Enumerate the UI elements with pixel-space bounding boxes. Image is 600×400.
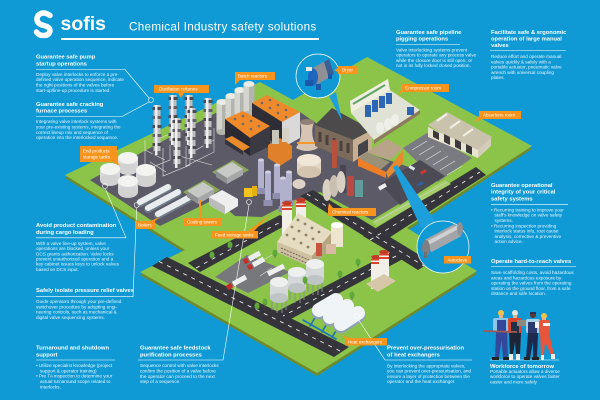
- text: facilitate safe and ergonomic operation: operation of large manual: [491, 36, 562, 42]
- text: guarantee operational integrity: • Recurring inspection providing: [491, 223, 557, 228]
- text: prevent over-pressurisation: Prevent over-pressurisation: [387, 346, 464, 352]
- wrench: [483, 331, 517, 332]
- icon: autoclave: [422, 222, 463, 258]
- text: guarantee safe pipeline pigging operations: operators to operate any process valve: [396, 53, 477, 58]
- label: end products storage tanks: [80, 146, 121, 166]
- text: avoid product contamination: [36, 223, 120, 272]
- workers illustration: [483, 310, 555, 360]
- text: operate hard-to-reach valves: distance and safe location.: [491, 291, 546, 296]
- text: turnaround and shutdown support: • Utilize specialist knowledge (project: [36, 363, 113, 368]
- text: guarantee safe pipeline pigging operations: Valve interlocking systems prevent: [396, 48, 468, 52]
- label: end products storage tanks: storage tanks: [83, 154, 111, 159]
- label: autoclave: Autoclave: [448, 258, 468, 262]
- text: operate hard-to-reach valves: operating the valves from the operating: [491, 281, 572, 286]
- text: guarantee safe feedstock purification processes: confirm the position of a valve before: [140, 368, 216, 374]
- text: guarantee operational integrity: analysis, corrective & preventive: [494, 234, 561, 239]
- orange shop: [358, 139, 403, 178]
- text: facilitate safe and ergonomic operation: Reduce effort and operate manual: [491, 54, 561, 59]
- text: facilitate safe and ergonomic operation: plates.: [491, 75, 505, 80]
- text: guarantee safe pump startup operations: Guarantee safe pump: [36, 54, 96, 60]
- text: guarantee safe pipeline pigging operations: pigging operations: [396, 37, 448, 43]
- logo: [36, 13, 106, 36]
- text: avoid product contamination: key cabinet issues keys to unlock valves: [36, 262, 120, 267]
- text: guarantee safe feedstock purification processes: step of a sequence.: [140, 379, 181, 384]
- icon: dryer: [305, 59, 334, 90]
- text: guarantee safe pump startup operations: the right positions of the valves before: [36, 82, 115, 88]
- text: guarantee safe pipeline pigging operations: not in its fully locked closed position.: [396, 63, 471, 68]
- text: safely isolate pressure relief valves: [36, 288, 134, 320]
- text: prevent over-pressurisation: ensure a layer of protection between the: [387, 374, 470, 379]
- text: guarantee safe pump startup operations: startup operations: [36, 62, 87, 68]
- text: guarantee operational integrity: safety systems: [491, 196, 533, 202]
- text: guarantee safe cracking furnace processes: correct lineup mix and sequence of: [36, 130, 109, 135]
- text: guarantee safe pump startup operations: start-up/line-up procedure is started.: [36, 88, 111, 93]
- text: operate hard-to-reach valves: [491, 259, 574, 296]
- worker 4: [539, 313, 555, 360]
- text: operate hard-to-reach valves: Save scaffolding costs, avoid hazardous: [491, 270, 574, 275]
- text: prevent over-pressurisation: of heat exchangers: [387, 353, 440, 359]
- label: compressor room: Compressor room: [405, 86, 441, 91]
- text: guarantee safe pump startup operations: defined valve operation sequence, indicate: [36, 77, 124, 82]
- label: end products storage tanks: End products: [83, 148, 110, 153]
- text: avoid product contamination: With a valve line-up system, valve: [36, 241, 106, 246]
- label: dryer: Dryer: [342, 68, 354, 73]
- text: turnaround and shutdown support: • Pre TA inspection to determine your: [36, 373, 113, 378]
- lower towers: [366, 250, 396, 292]
- text: turnaround and shutdown support: support & operator training): [40, 368, 97, 374]
- distillation columns: [145, 95, 214, 176]
- cars: [378, 165, 427, 190]
- text: workforce of tomorrow: Portable actuators allow a diverse: [490, 369, 560, 374]
- text: guarantee safe cracking furnace processes: furnace processes: [36, 109, 87, 115]
- pointer: autoclave inset: [393, 165, 469, 273]
- title: Chemical Industry safety solutions: [129, 20, 317, 34]
- text: guarantee safe pump startup operations: Deploy valve interlocks to enforce a pre-: [36, 72, 119, 77]
- text: guarantee safe cracking furnace processes: Integrating valve interlock systems with: [36, 119, 117, 124]
- text: guarantee safe feedstock purification processes: the operator can proceed to the next: [140, 374, 216, 379]
- worker 1: [492, 310, 510, 360]
- text: guarantee safe feedstock purification processes: Guarantee safe feedstock: [140, 346, 211, 352]
- label: absorbers room: [474, 111, 521, 122]
- text: guarantee operational integrity: [491, 183, 564, 244]
- text: prevent over-pressurisation: By interlocking the appropriate valves,: [387, 364, 465, 368]
- text: prevent over-pressurisation: operator and the heat exchanger.: [387, 379, 455, 384]
- beige plant building: [277, 213, 343, 268]
- text: guarantee operational integrity: • Recurring training to improve your: [491, 208, 564, 212]
- text: avoid product contamination: operations are blocked, unless your: [36, 246, 110, 251]
- text: guarantee operational integrity: Guarantee operational: [491, 183, 553, 189]
- worker 2: [508, 310, 526, 360]
- parking lots: [215, 133, 472, 293]
- text: guarantee safe cracking furnace processes: operation into the interlocked sequence.: [36, 135, 118, 140]
- label: batch reactors: [235, 72, 275, 85]
- text: workforce of tomorrow: Workforce of tomorrow: [490, 364, 554, 370]
- text: turnaround and shutdown support: interlocks.: [40, 384, 61, 389]
- text: guarantee safe pipeline pigging operations: [396, 30, 477, 68]
- text: workforce of tomorrow: workforce to operate valves faster: [490, 374, 560, 379]
- text: avoid product contamination: Avoid product contamination: [36, 223, 117, 229]
- text: facilitate safe and ergonomic operation: valves quickly & safely with a: [491, 60, 551, 64]
- text: safely isolate pressure relief valves: Safely isolate pressure relief valves: [36, 288, 134, 294]
- trucks: [227, 253, 284, 288]
- text: workforce of tomorrow: [490, 364, 560, 385]
- text: workforce of tomorrow: easier and more safely: [490, 380, 538, 385]
- label: autoclave: [444, 256, 471, 264]
- text: guarantee safe cracking furnace processes: [36, 102, 121, 140]
- label: feed storage tanks: Feed storage tanks: [215, 232, 254, 237]
- text: turnaround and shutdown support: actual turnaround scope related to: [40, 379, 111, 384]
- batch reactors: [216, 81, 300, 166]
- text: operate hard-to-reach valves: station on the ground floor, from a safe: [491, 286, 571, 291]
- text: guarantee safe feedstock purification processes: [140, 346, 219, 384]
- text: avoid product contamination: during cargo loading: [36, 230, 94, 236]
- label: dryer: [334, 66, 357, 74]
- isometric land base: [65, 57, 532, 376]
- text: facilitate safe and ergonomic operation: portable actuator, pneumatic valve: [491, 65, 562, 70]
- text: guarantee operational integrity: integrity of your critical: [491, 190, 556, 196]
- text: operate hard-to-reach valves: areas and hazardous exposure by: [491, 275, 562, 280]
- text: guarantee safe pipeline pigging operations: while the closure door is still open, or: [396, 58, 473, 63]
- connector lines: [36, 44, 576, 360]
- text: turnaround and shutdown support: [36, 346, 113, 389]
- water towers: [270, 259, 324, 313]
- label: chemical reactors: Chemical reactors: [332, 210, 369, 215]
- label: compressor room: [398, 84, 449, 96]
- text: turnaround and shutdown support: support: [36, 353, 58, 359]
- text: guarantee operational integrity: action advice.: [494, 239, 523, 244]
- truck: [209, 186, 257, 214]
- absorbers room: [428, 112, 492, 158]
- text: safely isolate pressure relief valves: switchover procedure by adopting engi-: [36, 304, 117, 310]
- label: distillation columns: Distillation columns: [159, 87, 198, 92]
- worker 3: [524, 312, 541, 360]
- cooling towers: [183, 160, 249, 204]
- text: prevent over-pressurisation: you can prevent over-pressurisation, and: [387, 369, 472, 374]
- heat exchangers: [303, 300, 358, 339]
- end products storage tanks: [100, 152, 156, 198]
- label: heat exchangers: [341, 335, 387, 346]
- label: cooling towers: [184, 200, 221, 226]
- roads: [152, 167, 486, 357]
- feed storage columns: [256, 158, 294, 212]
- text: prevent over-pressurisation: [387, 346, 472, 384]
- text: turnaround and shutdown support: Turnaround and shutdown: [36, 346, 109, 352]
- text: operate hard-to-reach valves: Operate hard-to-reach valves: [491, 259, 571, 265]
- chemical reactors: [322, 140, 363, 201]
- label: heat exchangers: Heat exchangers: [348, 340, 383, 344]
- label: feed storage tanks: [212, 214, 271, 238]
- label: cooling towers: Cooling towers: [187, 220, 218, 225]
- text: avoid product contamination: prevent unauthorized operation and a: [36, 256, 114, 262]
- label: boilers: [135, 217, 160, 229]
- pointer: dryer inset: [296, 54, 342, 121]
- text: facilitate safe and ergonomic operation: wrench with universal coupling: [491, 70, 554, 75]
- smoke stacks: [282, 198, 306, 235]
- text: guarantee operational integrity: staff's knowledge on valve safety: [494, 213, 563, 218]
- text: guarantee safe pump startup operations: [36, 54, 124, 93]
- text: facilitate safe and ergonomic operation: [491, 30, 567, 80]
- text: guarantee operational integrity: systems.: [494, 218, 513, 223]
- label: absorbers room: Absorbers room: [483, 113, 515, 118]
- text: guarantee safe pipeline pigging operations: Guarantee safe pipeline: [396, 30, 462, 36]
- text: facilitate safe and ergonomic operation: Facilitate safe & ergonomic: [491, 30, 567, 36]
- text: guarantee safe cracking furnace processes: your pre-existing systems, integrating the: [36, 124, 121, 130]
- text: guarantee safe feedstock purification processes: purification processes: [140, 353, 202, 359]
- logo: sofis: [60, 13, 106, 35]
- compressor room: [350, 79, 420, 144]
- label: batch reactors: Batch reactors: [238, 74, 268, 79]
- text: safely isolate pressure relief valves: digital valve sequencing systems.: [36, 315, 105, 320]
- label: distillation columns: [154, 85, 209, 98]
- text: facilitate safe and ergonomic operation: valves: [491, 43, 509, 49]
- text: avoid product contamination: DCS grants authorization. Valve locks: [36, 251, 114, 256]
- cooling tower and tanks: [292, 119, 321, 189]
- trees: [210, 242, 360, 311]
- text: guarantee safe feedstock purification processes: Sequence control with valve interlocks: [140, 363, 219, 368]
- boilers: [140, 187, 188, 215]
- label: chemical reactors: [328, 203, 376, 216]
- plant floor: [90, 108, 442, 226]
- text: safely isolate pressure relief valves: Guide operators through your pre-defined: [36, 299, 122, 304]
- main building: [315, 108, 372, 162]
- text: guarantee safe cracking furnace processes: Guarantee safe cracking: [36, 102, 104, 108]
- label: boilers: Boilers: [138, 223, 153, 228]
- text: safely isolate pressure relief valves: neering controls, such as mechanical &: [36, 310, 118, 315]
- text: avoid product contamination: based on DCS input.: [36, 267, 79, 272]
- text: guarantee operational integrity: interlock status info, root cause: [494, 228, 559, 234]
